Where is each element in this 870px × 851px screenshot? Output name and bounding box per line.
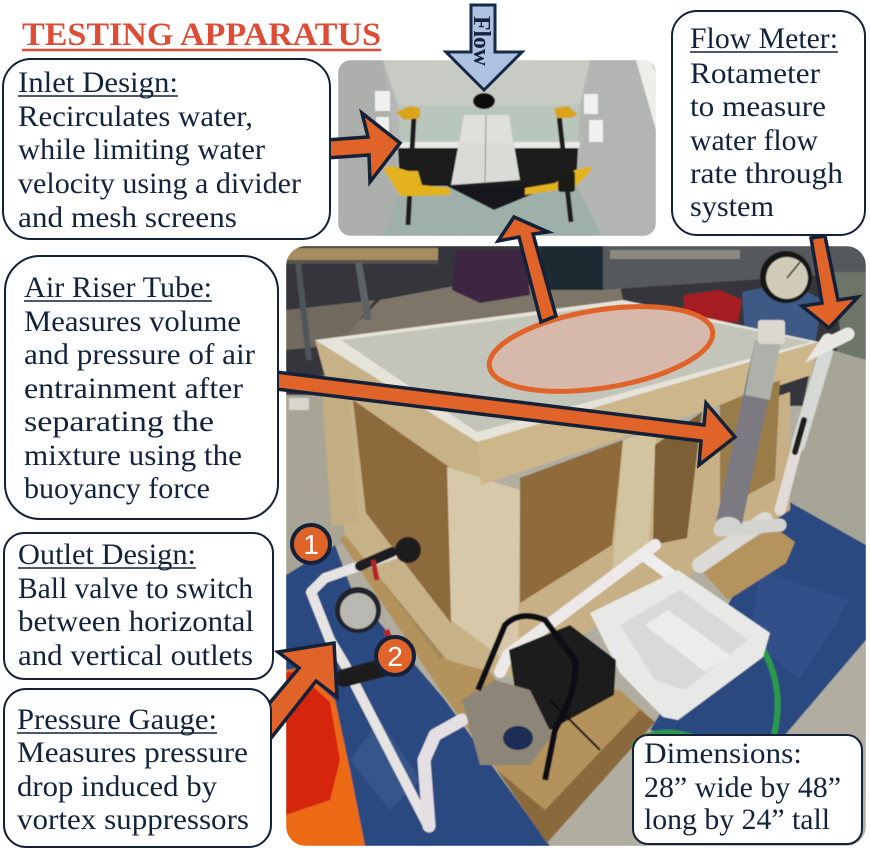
callout: dimensions: long by 24” tall xyxy=(644,804,830,836)
wood pallet xyxy=(339,525,795,843)
orange bucket xyxy=(286,668,365,846)
callout: pressure gauge: Measures pressure xyxy=(17,737,248,769)
arrow: to inlet design xyxy=(326,113,400,182)
callout: flow meter: to measure xyxy=(690,91,826,123)
callout: flow meter: rate through xyxy=(690,158,843,190)
callout: pressure gauge: drop induced by xyxy=(17,771,217,803)
callout: pressure gauge: Pressure Gauge: xyxy=(17,704,217,736)
callout: air riser tube: mixture using the xyxy=(24,440,242,472)
arrow: flow direction: Flow xyxy=(468,16,494,67)
callout: dimensions xyxy=(633,735,862,844)
callout: flow meter: water flow xyxy=(690,125,819,157)
arrow: to flow meter xyxy=(802,236,858,328)
callout: air riser tube: entrainment after xyxy=(24,373,243,405)
callout: air riser tube: Measures volume xyxy=(24,306,241,338)
crate xyxy=(315,300,819,680)
marker 1 xyxy=(292,525,330,563)
rotameter xyxy=(780,334,848,510)
callout: air riser tube: Air Riser Tube: xyxy=(24,272,212,304)
highlighted ellipse on crate lid xyxy=(483,293,719,405)
callout: pressure gauge: vortex suppressors xyxy=(17,804,249,836)
photo: main apparatus xyxy=(286,246,866,846)
callout: air riser tube: buoyancy force xyxy=(24,473,210,505)
marker 1: 1 xyxy=(303,529,319,560)
white tub xyxy=(590,570,770,720)
callout: inlet design: and mesh screens xyxy=(18,202,237,234)
title: TESTING APPARATUS xyxy=(22,17,381,53)
arrow: to pressure gauge xyxy=(268,643,337,742)
callout: outlet design: between horizontal xyxy=(18,606,254,638)
background workshop xyxy=(286,246,866,846)
callout: dimensions: Dimensions: xyxy=(644,738,802,770)
callout: inlet design: velocity using a divider xyxy=(18,168,301,200)
callout: air riser tube: separating the xyxy=(24,406,214,438)
lower pressure gauge xyxy=(335,587,381,633)
top dial gauge xyxy=(760,251,812,303)
marker 2 xyxy=(376,637,414,675)
callout: dimensions: 28” wide by 48” xyxy=(644,772,841,804)
callout: flow meter: system xyxy=(690,191,774,223)
callout: inlet design: Recirculates water, xyxy=(18,101,253,133)
callout: outlet design: Outlet Design: xyxy=(18,539,196,571)
marker 2: 2 xyxy=(387,641,403,672)
callout: inlet design: while limiting water xyxy=(18,134,265,166)
callout: air riser tube xyxy=(5,256,278,519)
blue tarp xyxy=(286,500,866,846)
callout: air riser tube: and pressure of air xyxy=(24,339,255,371)
arrow: to air riser tube xyxy=(276,372,735,465)
arrow: flow direction xyxy=(446,5,522,90)
callout: inlet design xyxy=(3,59,330,239)
jet pump xyxy=(462,616,616,780)
callout: flow meter: Rotameter xyxy=(690,58,820,90)
callout: outlet design: Ball valve to switch xyxy=(18,573,253,605)
water pipes, gauges and valves xyxy=(311,520,780,826)
callout: inlet design: Inlet Design: xyxy=(18,67,178,99)
callout: outlet design xyxy=(4,533,273,679)
callout: pressure gauge xyxy=(4,689,271,847)
tall riser tube xyxy=(715,320,785,533)
callout: flow meter: Flow Meter: xyxy=(690,23,838,55)
arrow: to inlet photo xyxy=(498,217,556,322)
callout: flow meter xyxy=(672,11,865,235)
callout: outlet design: and vertical outlets xyxy=(18,640,253,672)
photo: inlet interior xyxy=(338,60,656,236)
